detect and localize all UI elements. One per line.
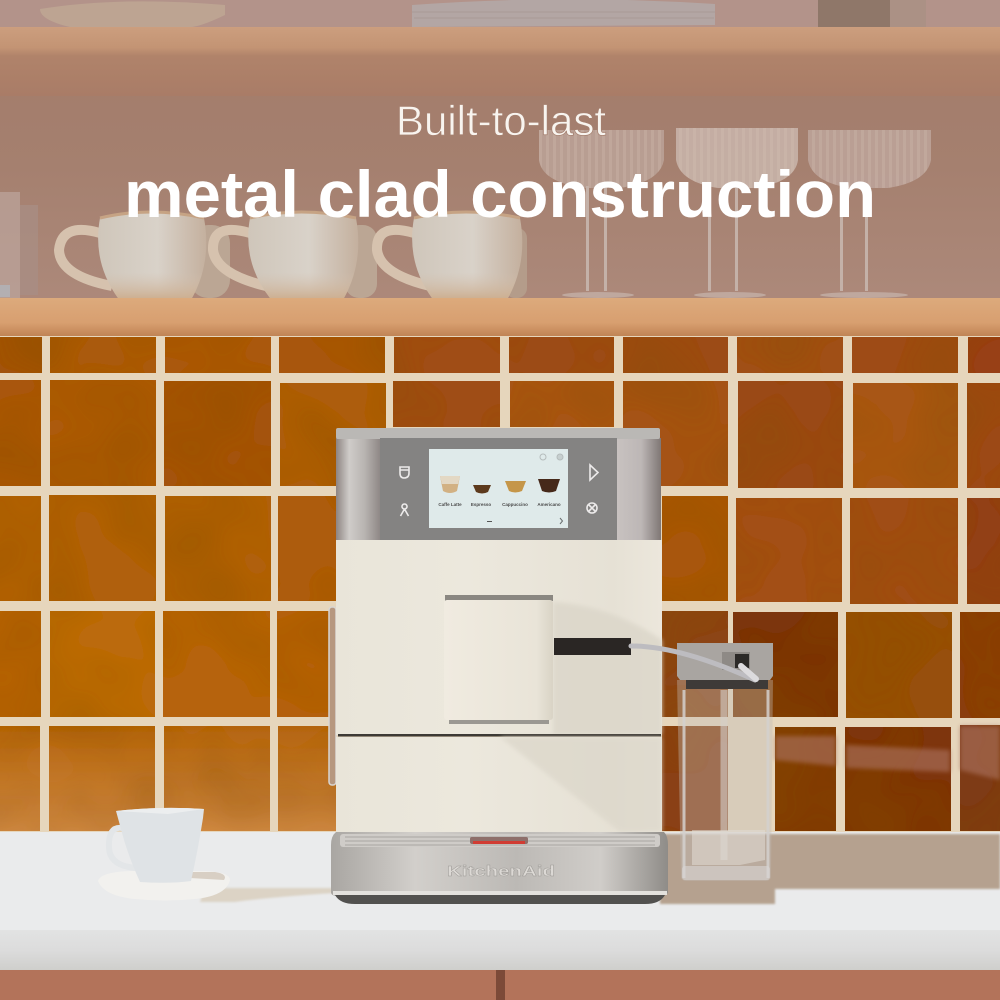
drink: americano: Americano [537,502,561,507]
coupe glasses [539,128,931,298]
shelf glass tumbler [0,192,38,298]
icon: cancel [587,503,597,513]
heading: metal clad construction: metal clad construction [124,157,876,231]
counter top [0,832,1000,932]
icon: person [400,504,408,516]
row 3 [0,611,41,717]
row 2 [0,496,41,601]
mug 1 [59,212,230,298]
icon: cup [400,467,409,478]
steel base tray [331,832,668,904]
lower cream body [336,737,662,832]
lower shadow [500,737,662,832]
row 1 [0,380,41,486]
glass 2 [676,128,798,298]
top cap [336,428,660,439]
row 0 [0,337,42,373]
cup handle [109,828,136,868]
glass 3 [808,130,931,298]
glaze reflections [775,726,1000,780]
mug 3 [377,212,527,298]
milk tube [631,646,756,680]
body shadow [553,602,662,735]
brew head [444,595,553,724]
jug body [677,680,773,881]
top shelf objects [0,0,1000,27]
milk connector [554,638,631,655]
wall background [0,0,1000,335]
drink: cappuccino: Cappuccino [502,502,528,507]
mug 2 [213,212,377,298]
heading: built-to-last: Built-to-last [396,97,606,144]
drink: caffe latte: Caffe Latte [438,502,462,507]
lower shelf [0,298,1000,336]
cup body [116,808,204,883]
row 4 [0,726,40,831]
touch screen [429,449,568,528]
upper cream body [336,540,662,735]
steel column right [617,438,661,540]
mugs on the shelf [59,212,527,298]
counter front edge [0,930,1000,970]
panel icons [400,465,598,516]
saucer [98,871,230,900]
drink: espresso: Espresso [471,502,491,507]
icon: play [590,465,598,480]
body seam [338,734,661,736]
glass 1 [539,130,664,298]
top shelf [0,27,1000,96]
machine shadow on counter [200,834,1000,904]
rear handle [329,607,336,785]
milk jug [677,643,773,881]
jug lid [677,643,773,680]
control panel [380,438,617,540]
steel column left [336,438,380,540]
coffee machine [329,428,668,904]
cabinet doors [0,970,1000,1000]
brand logo: KitchenAid [447,864,555,880]
saucer and cup [98,808,230,900]
tile backsplash [0,336,1000,834]
